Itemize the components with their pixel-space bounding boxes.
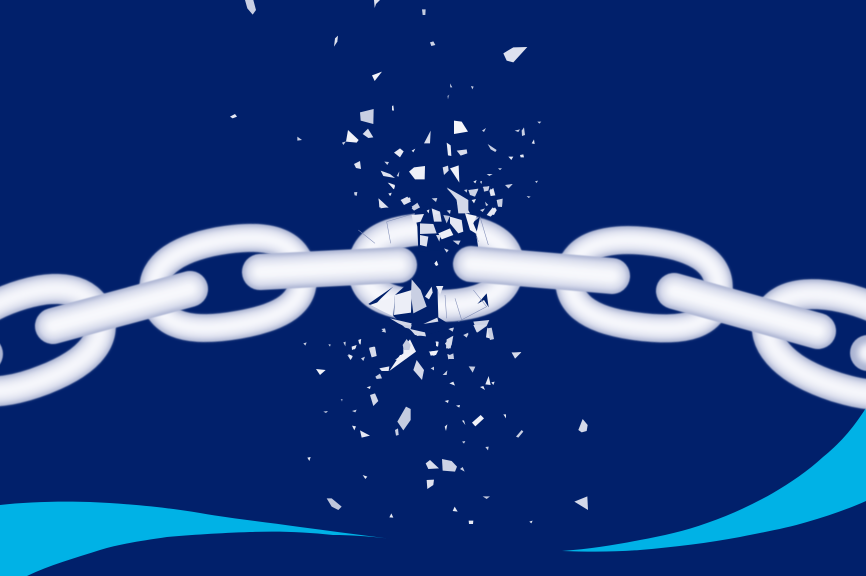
chain link: right ring — [564, 231, 724, 337]
break gaps in centre link — [368, 203, 489, 340]
chain link: far left ring — [0, 273, 113, 408]
chain link: left ring — [148, 230, 308, 336]
broken centre link — [348, 183, 521, 360]
chain bar: right upper — [471, 264, 612, 276]
wave: bottom right — [562, 408, 866, 552]
chain link: far right ring — [754, 275, 866, 412]
chain bar: left lower — [53, 289, 190, 326]
cracks in centre link — [358, 213, 488, 322]
chain bar: left upper — [260, 265, 399, 272]
shards flying upward — [230, 0, 541, 215]
shards on centre link — [348, 183, 521, 360]
shards flying downward — [303, 325, 588, 524]
chain bar: right lower — [674, 291, 818, 331]
wave: bottom left — [0, 502, 392, 576]
